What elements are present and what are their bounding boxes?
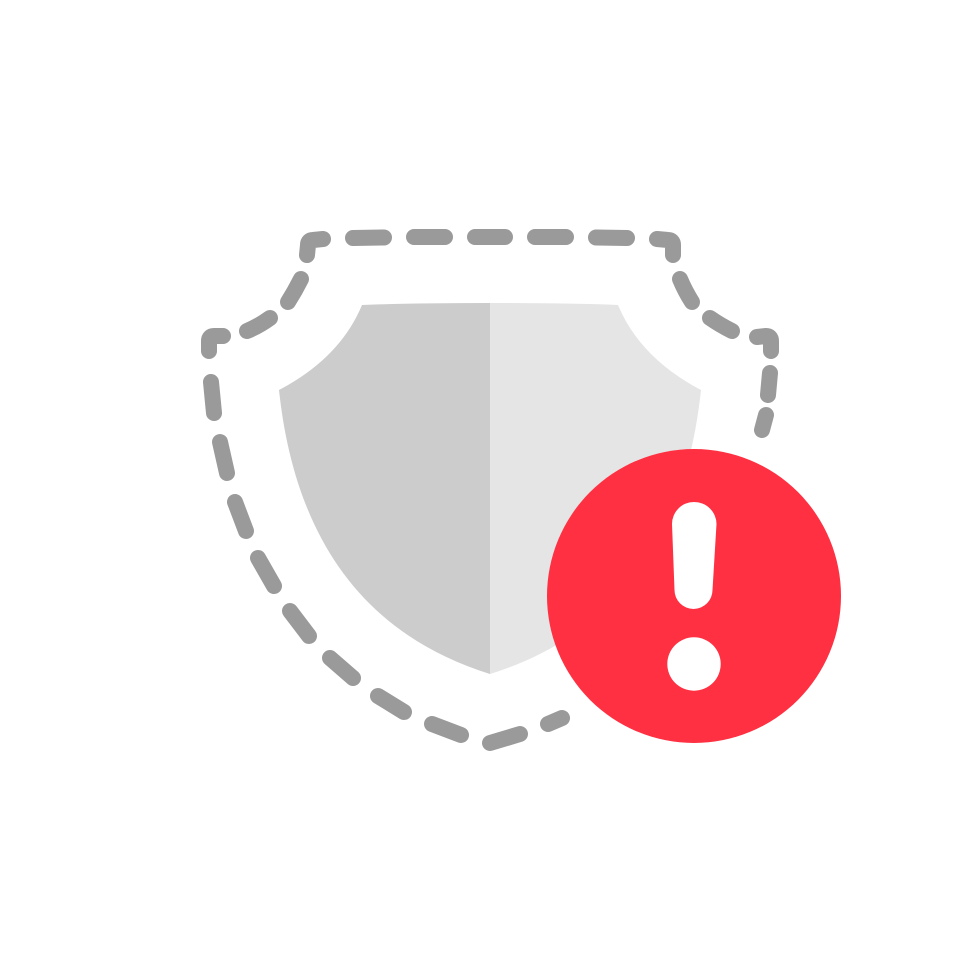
icon: shield right half bbox=[490, 303, 701, 674]
icon: red alert circle bbox=[547, 449, 841, 743]
icon: dashed shield outline bbox=[209, 237, 771, 743]
icon: exclamation dot bbox=[667, 637, 721, 691]
icon: shield left half bbox=[279, 303, 490, 674]
icon: exclamation bar bbox=[672, 502, 716, 609]
